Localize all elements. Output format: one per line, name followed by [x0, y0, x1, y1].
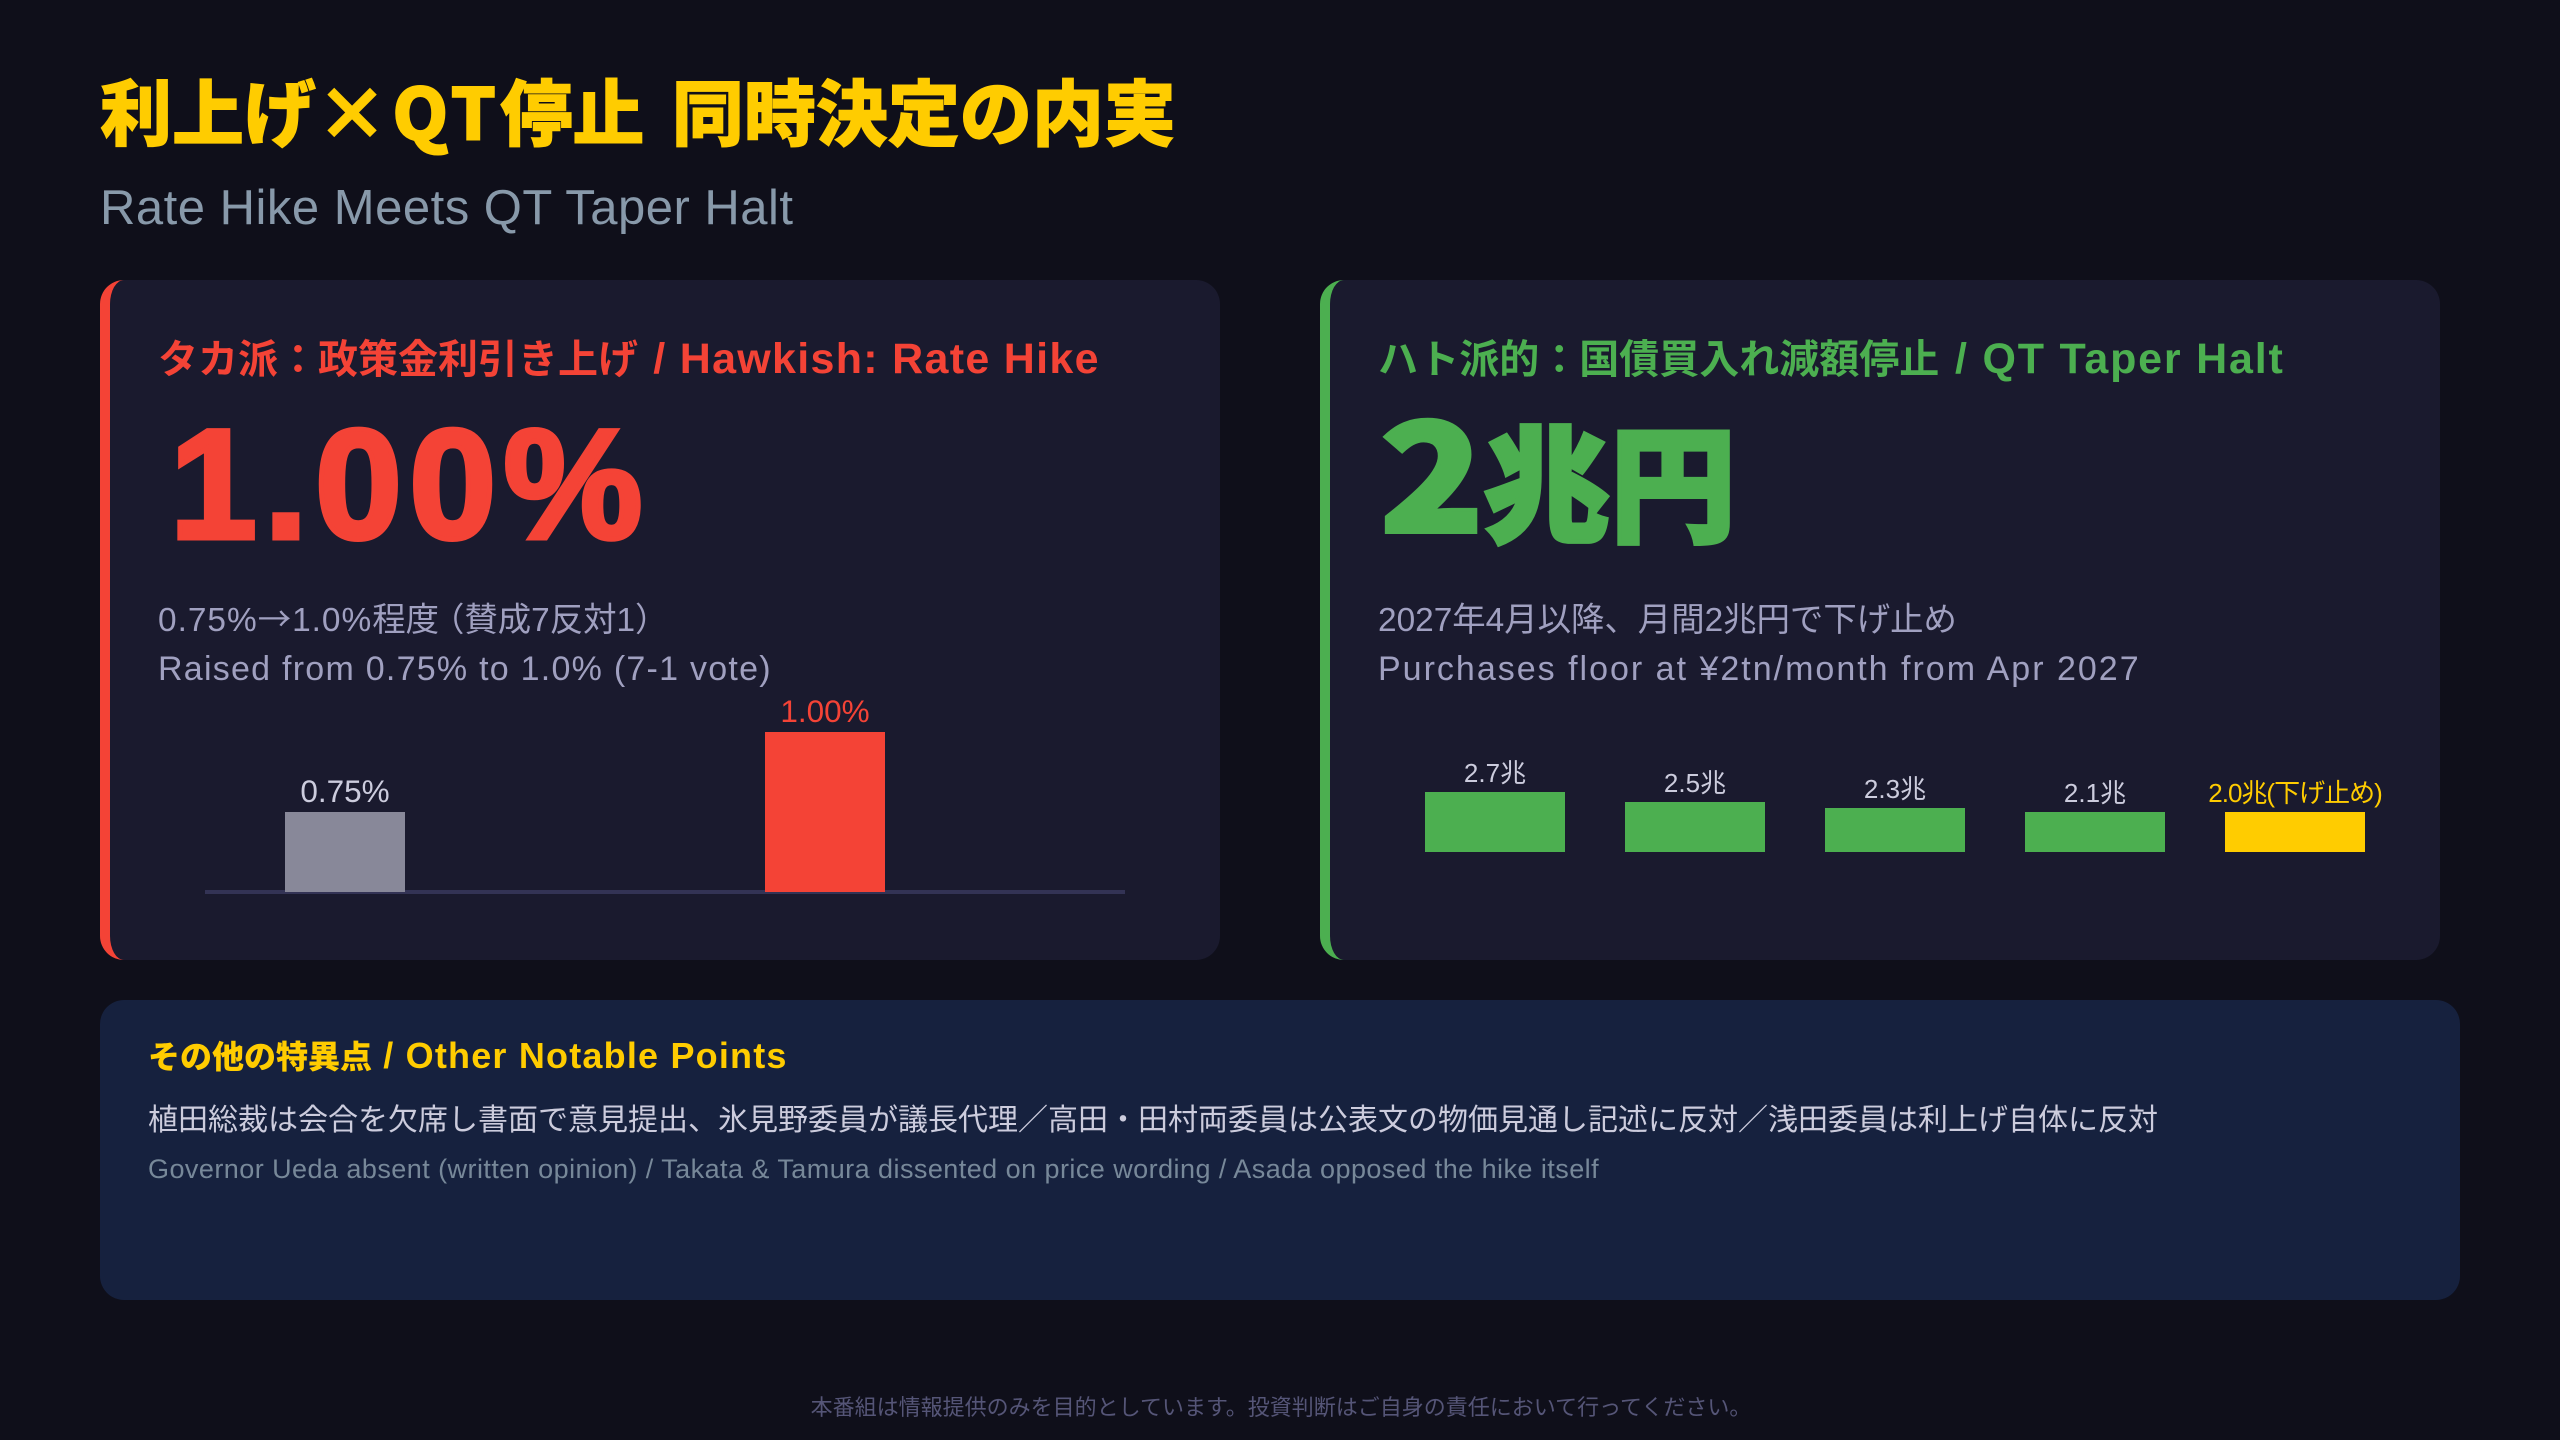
bar label: 2.0 floor: 2.0兆(下げ止め) — [2208, 778, 2382, 808]
panel heading: hawkish: タカ派：政策金利引き上げ / Hawkish: Rate Hike — [158, 335, 1100, 383]
subtitle: Rate Hike Meets QT Taper Halt — [100, 181, 794, 235]
notes text: Japanese: 植田総裁は会合を欠席し書面で意見提出、氷見野委員が議長代理／高田・田村両委員は公表文の物価見通し記述に反対／浅田委員は利上げ自体に反対 — [148, 1104, 2158, 1137]
big number: 2兆円 — [1380, 360, 1736, 575]
description: dovish: 2027年4月以降、月間2兆円で下げ止め — [1378, 602, 1957, 639]
bar: 1.00% — [765, 732, 885, 892]
bar chart: policy rate — [205, 693, 1125, 894]
axis line — [205, 890, 1125, 894]
big number: 1.00%: 1.00% — [170, 398, 650, 572]
bar: 2.0 floor — [2225, 812, 2365, 852]
bar chart: monthly purchases — [1425, 758, 2382, 852]
big number: 2兆円: 2 — [1380, 360, 1484, 575]
notes heading: その他の特異点 / Other Notable Points — [148, 1035, 788, 1076]
panel: other notable points — [100, 1000, 2460, 1300]
bar label: 2.7: 2.7兆 — [1464, 758, 1526, 788]
bar label: 2.1: 2.1兆 — [2064, 778, 2126, 808]
bar: 2.5 — [1625, 802, 1765, 852]
title: 利上げ×QT停止 同時決定の内実 — [100, 56, 1176, 161]
description: hawkish: 0.75%→1.0%程度（賛成7反対1） — [158, 592, 668, 641]
panel: dovish QT taper halt — [1320, 280, 2440, 960]
footer disclaimer: 本番組は情報提供のみを目的としています。投資判断はご自身の責任において行ってください。 — [811, 1395, 1751, 1420]
bar label: 2.3: 2.3兆 — [1864, 774, 1926, 804]
bar: 2.7 — [1425, 792, 1565, 852]
bar: 2.1 — [2025, 812, 2165, 852]
panel heading: dovish: ハト派的：国債買入れ減額停止 / QT Taper Halt — [1378, 335, 2285, 383]
description: hawkish: Raised from 0.75% to 1.0% (7-1 vote) — [158, 650, 772, 688]
description: dovish: Purchases floor at ¥2tn/month from Apr 2027 — [1378, 650, 2141, 688]
description: hawkish — [158, 592, 772, 688]
bar label: 1.00%: 1.00% — [780, 693, 870, 729]
bar: 0.75% — [285, 812, 405, 892]
big number: 2兆円: 兆円 — [1484, 387, 1736, 569]
bar label: 0.75%: 0.75% — [300, 773, 390, 809]
panel: hawkish rate hike — [100, 280, 1220, 960]
bar label: 2.5: 2.5兆 — [1664, 768, 1726, 798]
description: dovish — [1378, 602, 2141, 688]
bar: 2.3 — [1825, 808, 1965, 852]
notes text: English: Governor Ueda absent (written opinion) / Takata & Tamura dissented on price wording / Asada opposed the hike itself — [148, 1154, 1599, 1184]
